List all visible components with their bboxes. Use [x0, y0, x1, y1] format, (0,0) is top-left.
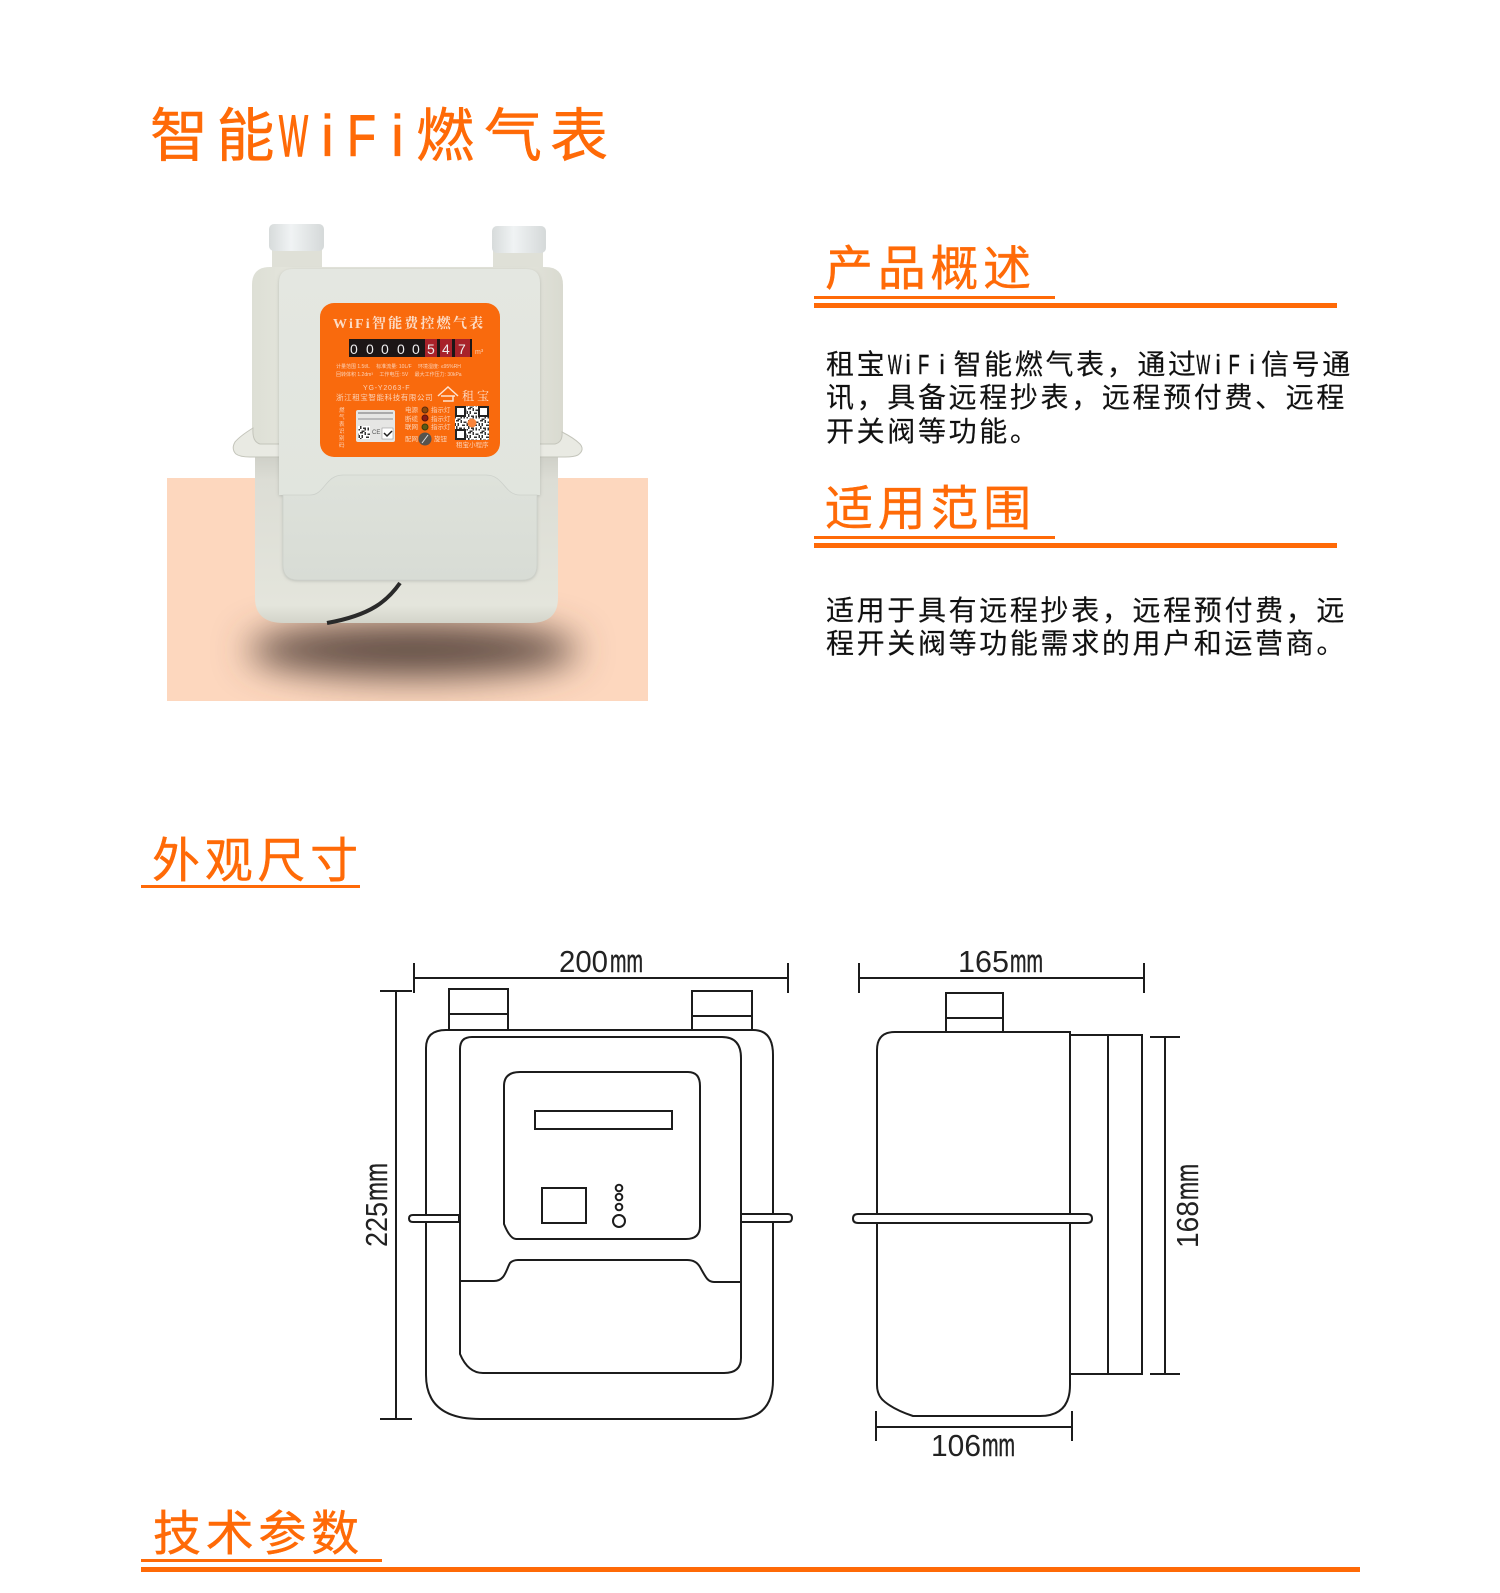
heading rule: technical parameters — [141, 1559, 1360, 1572]
height dimension 225mm: mm — [358, 1163, 394, 1201]
height dimension 168mm: 168 — [1170, 1201, 1205, 1248]
orange nameplate: 回转体积 1.2dm³ 工作电压: 5V 最大工作压力: 30kPa — [336, 371, 462, 378]
flange — [853, 1214, 1092, 1223]
depth dimension 106mm: 106 — [931, 1428, 981, 1463]
odometer: 0 — [350, 341, 358, 357]
cover profile — [1070, 1035, 1142, 1374]
icon: brand logo: 租宝 — [462, 389, 492, 403]
vertical label: 识 — [339, 428, 345, 435]
depth dimension 106mm: mm — [982, 1427, 1015, 1463]
meter lower body — [255, 445, 558, 623]
text: product overview: W — [1196, 349, 1212, 380]
odometer: 0 — [381, 341, 389, 357]
indicator lights: 旋钮 — [434, 434, 448, 443]
certification label — [356, 410, 395, 442]
indicator lights: 指示灯 — [431, 405, 451, 414]
text: product overview: 智能燃气表，通过 — [954, 349, 1199, 380]
orange nameplate: 浙江租宝智能科技有限公司 — [336, 392, 433, 402]
certification label: CE — [372, 430, 380, 436]
indicator lights: 指示灯 — [431, 414, 451, 423]
heading: scope of use: 适用范围 — [825, 483, 1036, 536]
orange nameplate — [320, 303, 500, 457]
text: product overview: 租宝 — [826, 349, 887, 380]
connector — [946, 993, 1003, 1032]
photo backdrop — [167, 478, 648, 701]
counter window — [535, 1111, 672, 1129]
heading: product overview: 产品概述 — [825, 243, 1036, 296]
chart: front view dimension drawing — [358, 943, 792, 1419]
panel: product photo — [167, 224, 648, 701]
indicator lights: 联网 — [405, 422, 418, 431]
text: product overview: i — [905, 349, 914, 380]
icon: brand logo — [438, 387, 492, 403]
text: product overview: 开关阀等功能。 — [826, 416, 1041, 447]
odometer: 7 — [458, 341, 466, 357]
depth dimension 106mm — [876, 1411, 1072, 1463]
text: product overview: i — [1215, 349, 1224, 380]
title: 智 — [150, 104, 208, 169]
vertical label: 码 — [339, 441, 345, 449]
title: W — [279, 104, 308, 169]
text: product overview: i — [1249, 349, 1258, 380]
heading rule: scope — [814, 536, 1337, 548]
vertical label: 燃 — [339, 406, 345, 414]
indicator lights: 断缆 — [405, 414, 418, 423]
spec rows: 计量范围 1.5t/L 标准流量: 10L/F 环境湿度: ≤95%RH — [336, 363, 461, 370]
title: F — [347, 104, 376, 169]
chart: side view dimension drawing — [853, 943, 1205, 1463]
vertical label: 气 — [339, 413, 345, 421]
width dimension 200mm: 200 — [559, 944, 608, 979]
vertical label: 表 — [339, 420, 345, 428]
title: i — [391, 104, 404, 169]
odometer: 5 — [427, 341, 435, 357]
flanges — [409, 1214, 792, 1222]
text: product overview: F — [918, 349, 931, 380]
odometer: 0 — [397, 341, 405, 357]
text: product overview: i — [939, 349, 948, 380]
meter shadow — [248, 623, 578, 677]
body profile — [877, 1032, 1070, 1416]
text: scope of use: 适用于具有远程抄表，远程预付费，远 — [826, 595, 1347, 626]
width dimension 165mm — [859, 943, 1144, 993]
indicators — [613, 1185, 625, 1227]
display panel — [504, 1072, 700, 1239]
heading rule: dimensions — [141, 885, 360, 888]
odometer: 4 — [442, 341, 450, 357]
heading rule: overview — [814, 296, 1337, 308]
odometer — [349, 339, 484, 357]
plate heading: WiFi智能费控燃气表 — [333, 315, 485, 332]
height dimension 168mm — [1150, 1037, 1205, 1374]
odometer: m³ — [475, 349, 484, 356]
width dimension 165mm: mm — [1010, 943, 1043, 979]
flanges — [233, 428, 582, 457]
QR caption: 租宝小程序 — [456, 440, 489, 449]
front cover — [279, 269, 540, 580]
inlet connectors — [269, 224, 546, 270]
indicator lights — [405, 405, 451, 446]
cover seam — [460, 1260, 741, 1282]
title: i — [321, 104, 334, 169]
heading: technical parameters: 技术参数 — [153, 1508, 364, 1561]
text: product overview: F — [1228, 349, 1242, 380]
label square — [542, 1188, 586, 1223]
odometer: 0 — [366, 341, 374, 357]
front cover — [460, 1037, 741, 1373]
height dimension 225mm: 225 — [359, 1202, 394, 1247]
text: product overview: 讯，具备远程抄表，远程预付费、远程 — [826, 382, 1347, 413]
cover lower tab — [283, 475, 537, 580]
connectors — [449, 989, 752, 1030]
signal cable — [327, 583, 400, 623]
height dimension 168mm: mm — [1169, 1164, 1205, 1200]
width dimension 200mm — [414, 943, 788, 993]
height dimension 225mm — [358, 991, 412, 1419]
title: 气 — [484, 104, 542, 169]
text: product overview: W — [888, 349, 903, 380]
title: 燃 — [416, 104, 474, 169]
text: product overview: 信号通 — [1261, 349, 1353, 380]
icon: gas meter — [233, 224, 582, 623]
odometer: 0 — [412, 341, 420, 357]
heading: dimensions: 外观尺寸 — [152, 835, 363, 888]
indicator lights: 配网 — [405, 435, 418, 443]
QR code — [455, 406, 489, 440]
width dimension 165mm: 165 — [958, 944, 1009, 979]
title: 能 — [216, 104, 275, 169]
indicator lights: 指示灯 — [431, 422, 451, 431]
model and maker: YG-Y2063-F — [363, 385, 410, 392]
meter upper body — [252, 267, 563, 450]
outer body — [426, 1030, 773, 1419]
indicator lights: 电源 — [405, 405, 418, 414]
text: scope of use: 程开关阀等功能需求的用户和运营商。 — [826, 628, 1347, 659]
vertical label: 别 — [339, 434, 345, 442]
width dimension 200mm: mm — [610, 943, 643, 979]
title: 表 — [550, 104, 608, 169]
